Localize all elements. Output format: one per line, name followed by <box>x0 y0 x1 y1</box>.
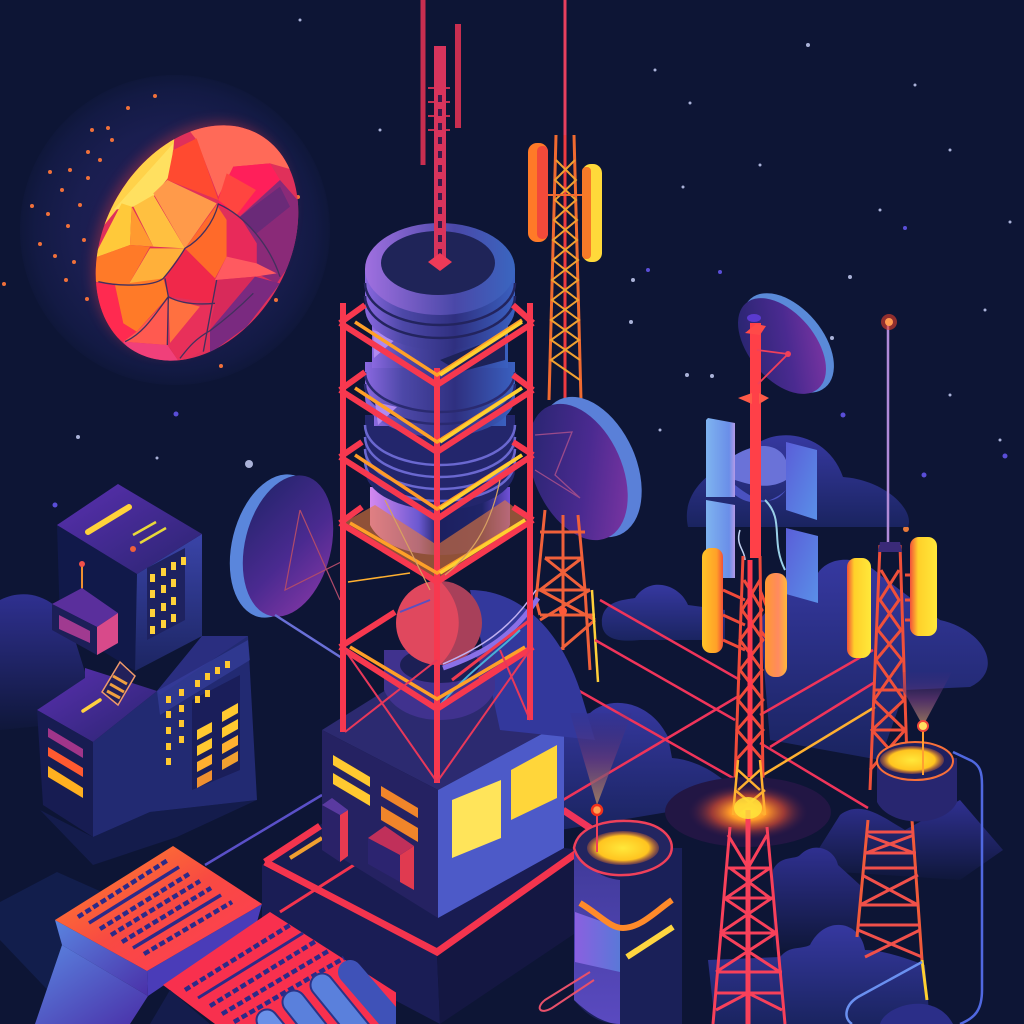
antenna top center <box>423 0 458 165</box>
pedestal far right <box>877 672 957 822</box>
keyboard left <box>35 846 262 1024</box>
central building <box>322 650 564 918</box>
cloud: lower right puff 1 <box>773 848 860 950</box>
base platform <box>262 818 580 1024</box>
cloud: behind far right tower <box>760 560 988 760</box>
cloud: lower right mound <box>810 800 1003 880</box>
mid tower lattice upper <box>723 556 768 810</box>
cylinder beacon centre <box>570 713 682 1024</box>
signal spark at tower <box>559 607 567 615</box>
right big dish <box>509 381 662 556</box>
cloud: behind beacon <box>540 700 740 830</box>
small rooftop box <box>52 561 118 655</box>
far right tower <box>847 314 937 790</box>
mid tower lower lattice <box>713 810 785 1024</box>
tower glow lattice <box>733 760 765 815</box>
network lines <box>205 600 875 887</box>
cloud: left of buildings <box>0 594 100 730</box>
orange particle dots <box>2 94 300 368</box>
planet halo <box>20 75 330 385</box>
central mast <box>428 46 452 271</box>
lower tower under right dish <box>536 510 598 682</box>
paperclip pipe <box>540 972 594 1011</box>
blue fingers <box>267 972 400 1024</box>
mid tower yellow pills <box>702 548 787 677</box>
planet glow <box>52 86 332 390</box>
keyboard right <box>150 912 400 1024</box>
back tower top <box>528 0 602 400</box>
glass tube cable <box>440 590 538 705</box>
stars <box>52 18 1012 532</box>
left building upper <box>57 484 202 671</box>
cloud: lower right puff 3 <box>880 1004 953 1024</box>
left building lower <box>37 636 257 865</box>
cloud: small left of mid tower <box>602 585 725 641</box>
scaffold frame <box>340 303 533 783</box>
glow at tower base <box>665 777 831 847</box>
blue cable right <box>953 752 982 1024</box>
sphere base and sphere <box>384 581 495 720</box>
blue cable lower <box>846 962 922 1024</box>
lower left shadow shape <box>0 872 120 1024</box>
far right tower lower lattice <box>857 820 927 1000</box>
planet <box>96 125 298 361</box>
right mid tower with dish <box>706 276 852 603</box>
cloud: behind mid tower <box>687 435 909 527</box>
bright core <box>734 797 762 819</box>
cloud: lower right puff 2 <box>708 925 930 1024</box>
blue cloud behind sphere <box>470 590 595 740</box>
central stacked cylinders <box>365 223 515 555</box>
left big dish <box>216 465 347 627</box>
